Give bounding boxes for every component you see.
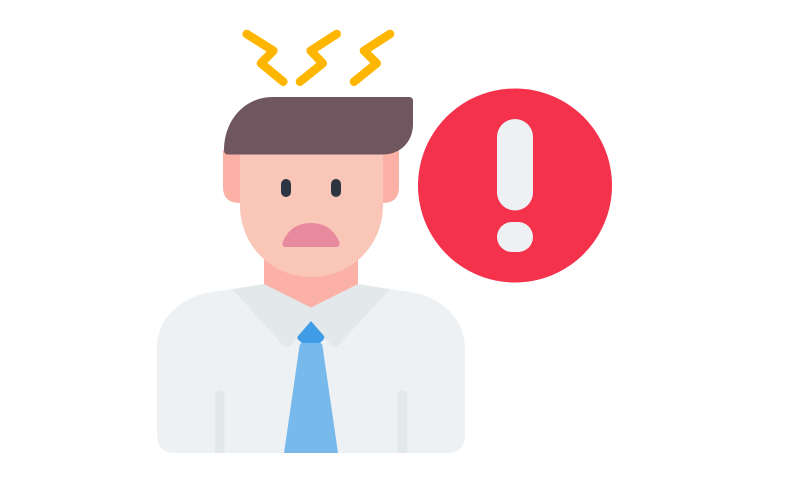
- hair: [224, 97, 413, 154]
- neck: [264, 255, 358, 308]
- shirt crease right: [398, 390, 407, 453]
- red circle: [418, 88, 612, 282]
- tie blade: [284, 343, 338, 453]
- tie knot: [297, 321, 324, 343]
- ear right: [383, 150, 399, 203]
- icon: alert circle: [418, 88, 612, 282]
- eye right: [331, 179, 341, 197]
- bolt right: [354, 34, 390, 82]
- collar: [232, 284, 390, 347]
- shirt: [157, 284, 465, 453]
- shirt crease left: [215, 390, 225, 453]
- bolt middle: [300, 34, 337, 82]
- eye left: [281, 179, 291, 197]
- ear left: [223, 150, 240, 203]
- tie: [284, 321, 338, 453]
- person: shirt body: [157, 284, 465, 453]
- face: [240, 150, 383, 277]
- mouth: [282, 223, 340, 247]
- exclamation bar: [497, 119, 533, 210]
- icon: stress lightning bolts: [247, 34, 390, 82]
- bolt left: [247, 34, 283, 82]
- exclamation dot: [497, 222, 533, 252]
